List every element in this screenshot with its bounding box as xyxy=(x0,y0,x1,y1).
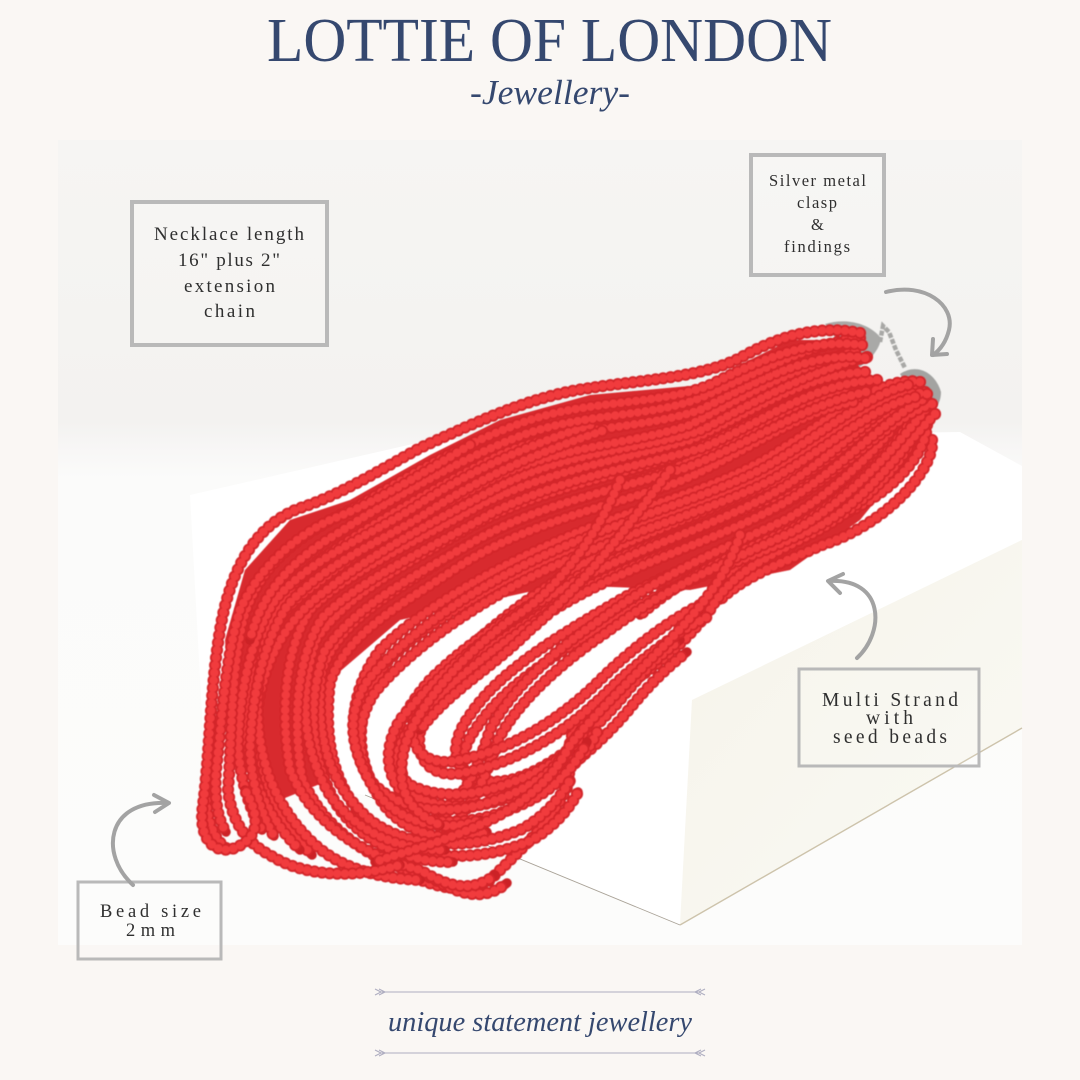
top ornament line xyxy=(375,989,705,995)
callout: silver clasp: findings xyxy=(784,237,850,256)
callout: multi strand: Multi Strand xyxy=(822,690,958,711)
callout: multi strand: with xyxy=(866,708,913,729)
callout: necklace length: 16" plus 2" xyxy=(178,250,280,271)
tagline: unique statement jewellery xyxy=(388,1006,692,1038)
white display block xyxy=(190,432,1022,925)
photo: necklace on white block xyxy=(58,140,1022,945)
callout: multi strand: seed beads xyxy=(833,727,947,748)
callout: bead size: 2mm xyxy=(126,921,176,941)
title: LOTTIE OF LONDON xyxy=(267,7,832,75)
arrow: to beads xyxy=(113,795,169,885)
subtitle: -Jewellery- xyxy=(470,73,630,112)
callout: silver clasp: clasp xyxy=(797,193,837,212)
photo backdrop xyxy=(58,140,1022,945)
callout: bead size xyxy=(78,882,221,959)
red multi-strand necklace xyxy=(202,330,935,894)
callout: silver clasp xyxy=(751,155,884,275)
arrow: to clasp xyxy=(886,290,950,355)
arrow: to strands xyxy=(828,574,875,658)
callout: bead size: Bead size xyxy=(100,902,201,922)
callout: necklace length xyxy=(132,202,327,345)
callout: necklace length: Necklace length xyxy=(154,224,304,245)
callout: silver clasp: Silver metal xyxy=(769,171,866,190)
silver clasp and chain xyxy=(825,321,941,414)
callout: necklace length: chain xyxy=(204,301,256,322)
callout: silver clasp: & xyxy=(811,215,824,234)
callout: multi strand xyxy=(799,669,979,766)
bottom ornament line xyxy=(375,1050,705,1056)
callout: necklace length: extension xyxy=(184,276,276,297)
